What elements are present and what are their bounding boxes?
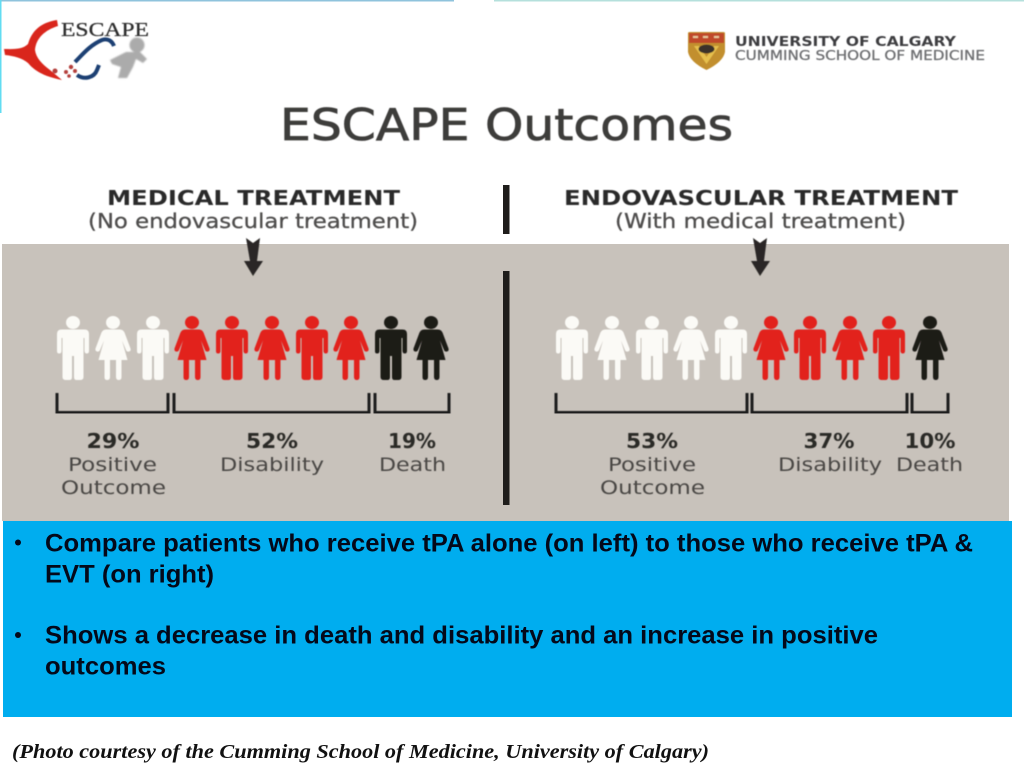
bullet 1: [15, 530, 973, 588]
school name: CUMMING SCHOOL OF MEDICINE: [735, 48, 985, 64]
labels: endovascular treatment: Outcome: [600, 477, 705, 499]
labels: medical treatment: 52%: [246, 429, 298, 453]
labels: medical treatment: Death: [379, 454, 446, 476]
heading: endovascular treatment: [564, 186, 958, 233]
labels: endovascular treatment: Disability: [778, 454, 882, 476]
photo credit: (Photo courtesy of the Cumming School of Medicine, University of Calgary): [12, 741, 709, 763]
heading: endovascular treatment: ENDOVASCULAR TREATMENT: [564, 186, 958, 210]
labels: medical treatment: 19%: [388, 429, 436, 453]
panel: blue summary box: [3, 521, 1012, 717]
positive outcome figures: [57, 316, 169, 380]
centre divider: [503, 271, 510, 505]
positive outcome figures: [556, 316, 747, 380]
heading: medical treatment: MEDICAL TREATMENT: [107, 186, 400, 210]
labels: endovascular treatment: 10%: [904, 429, 956, 453]
logo: University of Calgary: [688, 32, 985, 70]
labels: medical treatment: [61, 429, 446, 499]
labels: endovascular treatment: Positive: [608, 454, 696, 476]
icon: crest shield: [688, 32, 725, 70]
labels: medical treatment: Positive: [68, 454, 157, 476]
icon: running figure: [110, 38, 147, 78]
panel: grey outcomes background: [2, 244, 1009, 521]
bullet 2: [15, 622, 878, 680]
pictogram: medical treatment: [57, 316, 449, 380]
icon: red artery: [4, 20, 62, 80]
university name: UNIVERSITY OF CALGARY: [735, 34, 956, 50]
top divider: [503, 185, 510, 234]
bullet 1: Compare patients who receive tPA alone (on left) to those who receive tPA &: [45, 530, 973, 558]
brackets: endovascular treatment: [556, 393, 948, 412]
bullet 1: EVT (on right): [45, 560, 214, 588]
arrow: medical treatment: [244, 238, 263, 276]
bullet 2: Shows a decrease in death and disability and an increase in positive: [45, 622, 878, 650]
disability figures: [753, 316, 905, 380]
death figures: [375, 316, 449, 380]
disability figures: [174, 316, 369, 380]
logo wordmark: ESCAPE: [61, 19, 149, 41]
title: ESCAPE Outcomes: [280, 100, 733, 151]
labels: endovascular treatment: [600, 429, 963, 499]
bullet 2: outcomes: [45, 652, 166, 680]
labels: medical treatment: 29%: [86, 429, 140, 453]
heading: medical treatment: [88, 186, 418, 233]
heading: medical treatment: (No endovascular treatment): [88, 209, 418, 233]
icon: blue catheter: [75, 39, 114, 78]
arrow: endovascular treatment: [751, 238, 770, 276]
labels: endovascular treatment: Death: [896, 454, 963, 476]
labels: medical treatment: Outcome: [61, 477, 166, 499]
top edge accent lines: [0, 0, 1024, 113]
labels: medical treatment: Disability: [220, 454, 324, 476]
brackets: medical treatment: [57, 393, 449, 412]
death figure: [912, 316, 948, 380]
icon: clot fragments: [52, 65, 77, 78]
logo: ESCAPE trial: [4, 19, 149, 80]
pictogram: endovascular treatment: [556, 316, 948, 380]
labels: endovascular treatment: 53%: [626, 429, 678, 453]
heading: endovascular treatment: (With medical treatment): [615, 209, 906, 233]
labels: endovascular treatment: 37%: [804, 429, 854, 453]
